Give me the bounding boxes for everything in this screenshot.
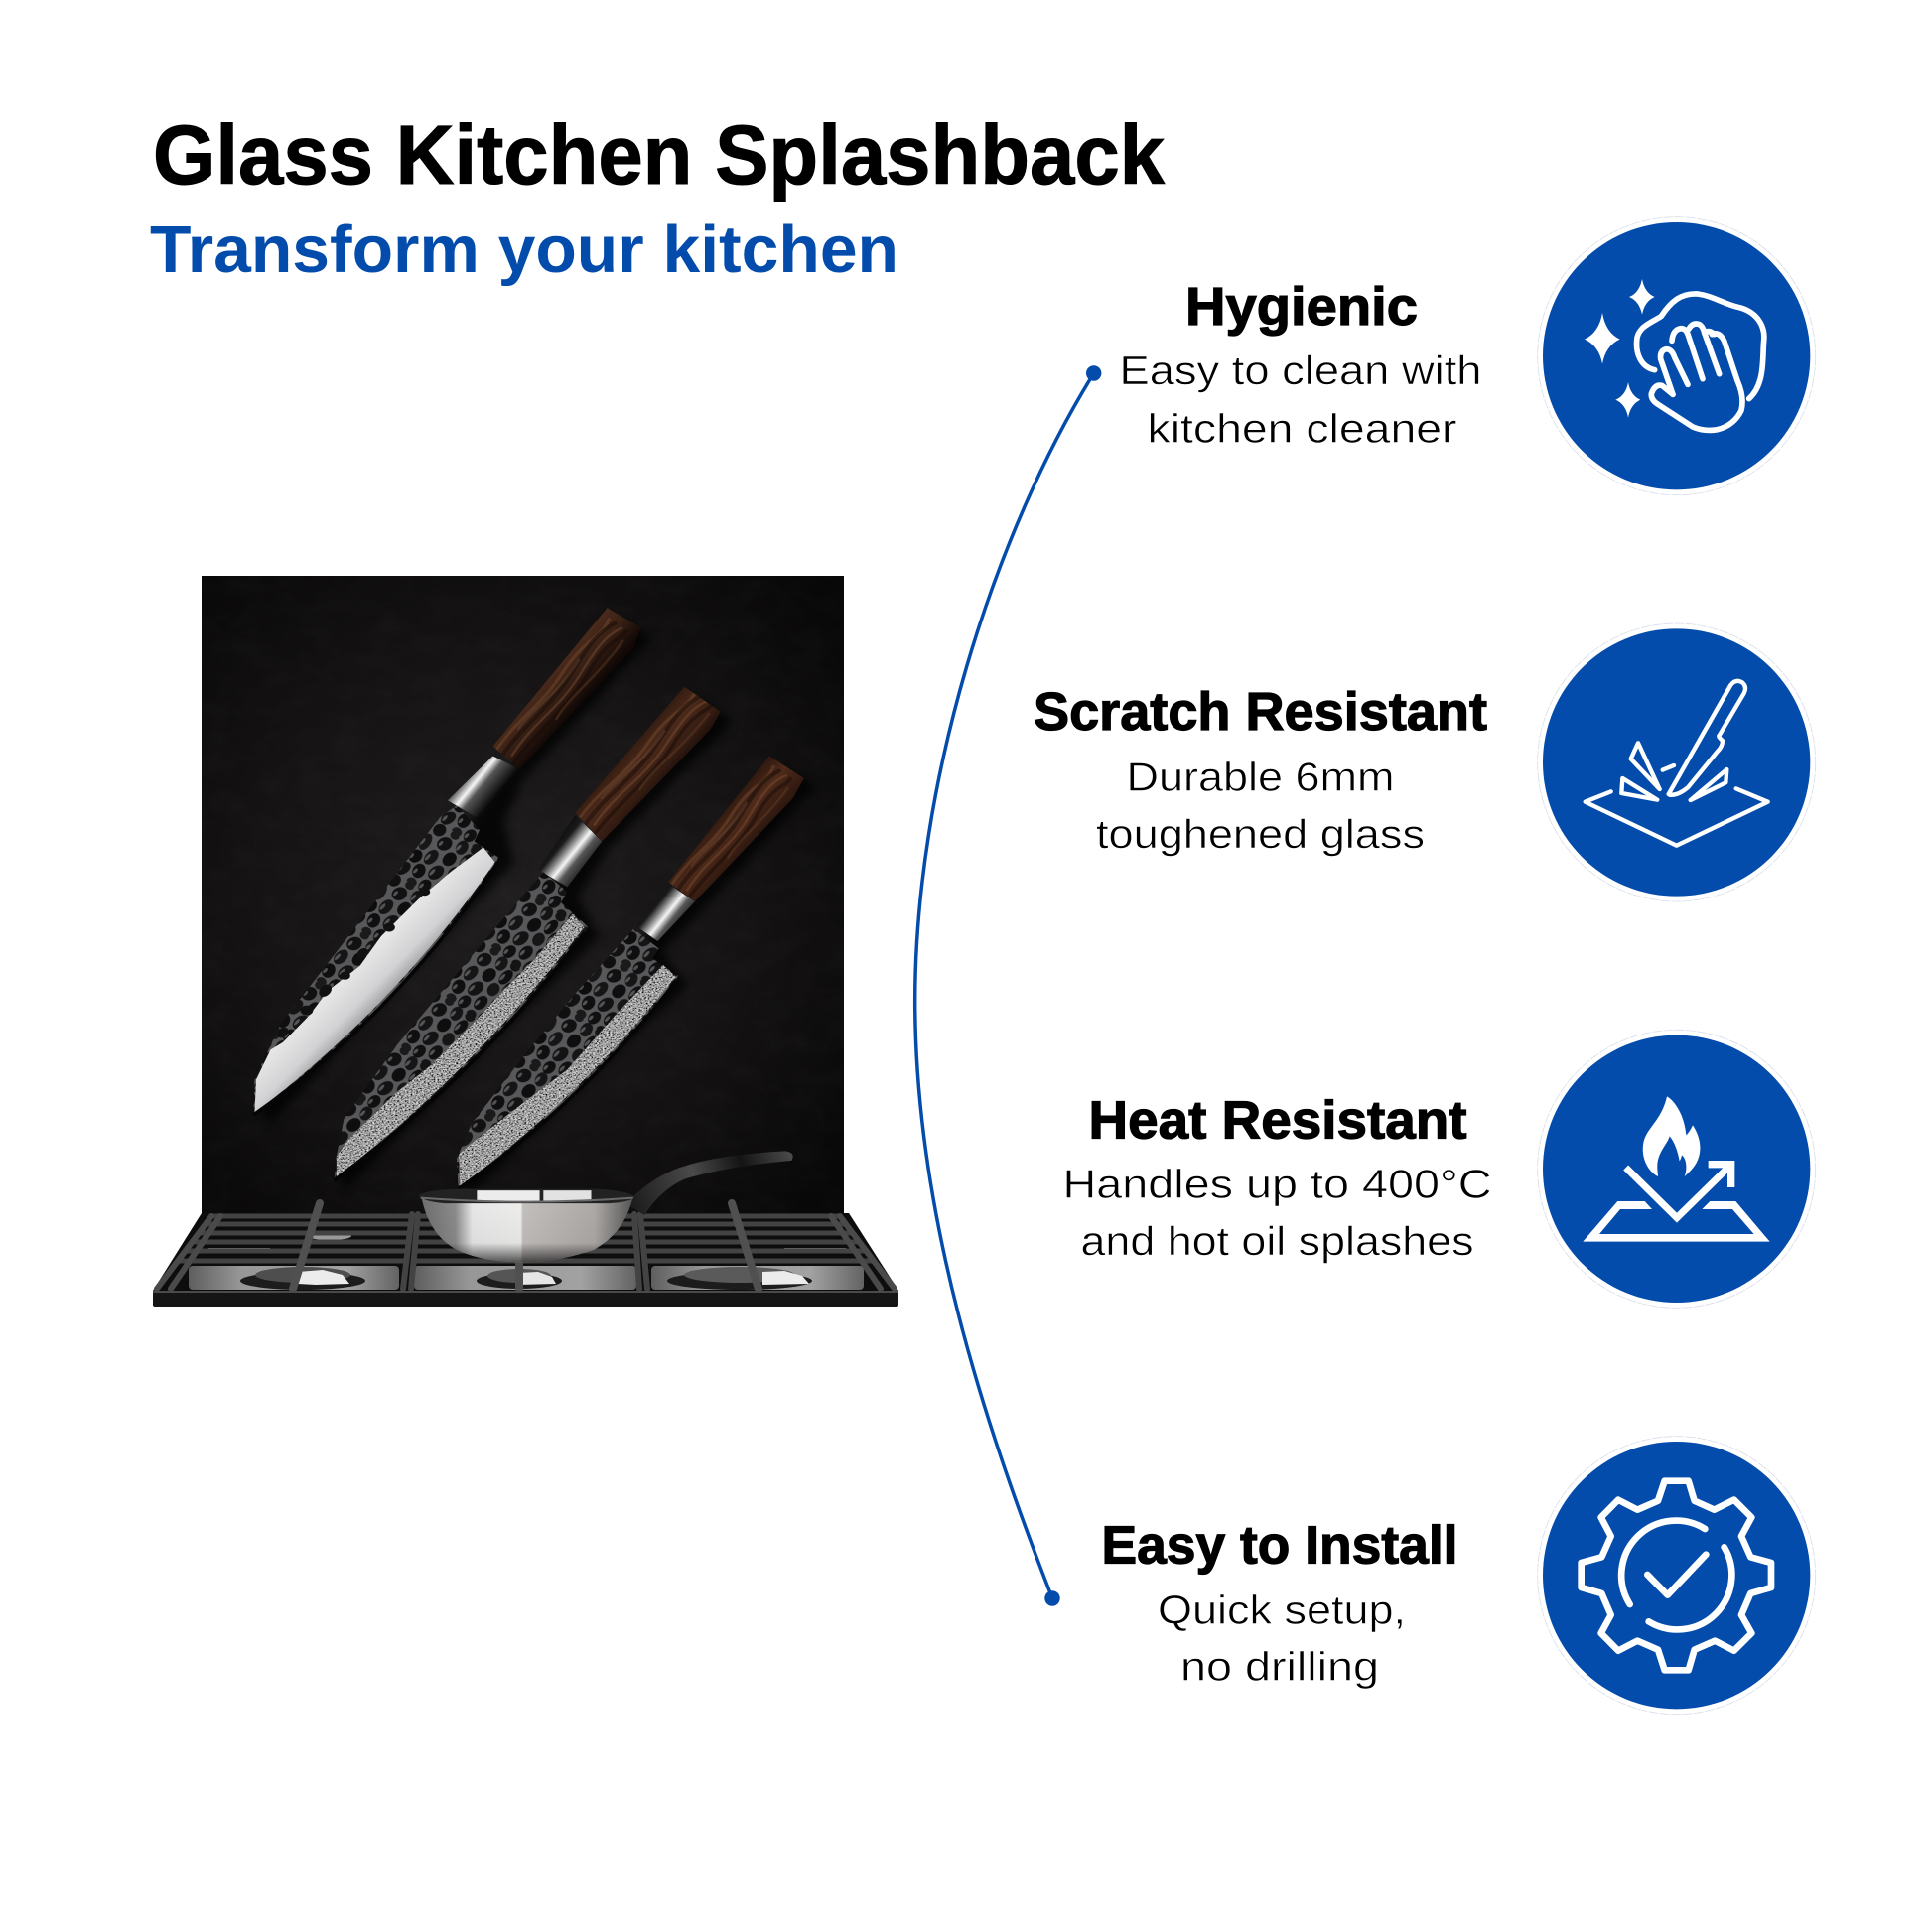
text: easy to clean [1120,347,1481,452]
gas hob [153,1203,898,1307]
burners [208,1231,846,1290]
burner trays [189,1266,864,1290]
heading: Hygienic: Hygienic [1185,277,1418,337]
knife 3 blade [457,929,678,1189]
icon: gear with check mark [1538,1437,1816,1715]
heading: Easy to Install: Easy to Install [1102,1515,1457,1575]
knife 3 handle [668,756,804,901]
knife 2 blade [335,872,588,1180]
text: durable glass: toughened glass [1096,811,1425,857]
feature: scratch resistant [1034,682,1487,857]
knife 2 ferrule [538,815,602,887]
hob deck [153,1213,898,1291]
text: durable glass: Durable 6mm [1126,755,1394,800]
pan handle [625,1151,793,1215]
frying pan [418,1151,793,1262]
knife set [253,608,815,1198]
knife 2 [335,687,721,1180]
knife 1 blade [253,805,498,1115]
infographic canvas [151,122,1816,1716]
text: quick setup: no drilling [1180,1643,1379,1689]
text: quick setup [1158,1587,1406,1689]
heading: Heat Resistant: Heat Resistant [1088,1091,1467,1151]
pan rim [418,1189,635,1203]
splashback panel [202,576,844,1221]
knife 2 handle [575,687,721,841]
text: easy to clean: kitchen cleaner [1148,406,1457,452]
feature: hygienic [1120,277,1481,452]
knife 1 [253,608,640,1115]
grate bars [157,1203,895,1289]
title: Glass Kitchen Splashback [153,108,1165,202]
feature: heat resistant [1062,1091,1491,1264]
knife 3 ferrule [636,885,695,941]
text: quick setup: Quick setup, [1158,1587,1406,1633]
heading: Scratch Resistant: Scratch Resistant [1034,682,1487,742]
text: handles heat: Handles up to 400°C [1062,1162,1491,1207]
pan body [422,1198,632,1262]
knife 1 handle [492,608,640,769]
knife 3 [457,756,804,1189]
text: handles heat [1062,1162,1491,1264]
product image: knives splashback over gas hob [153,576,898,1307]
knife shadows [259,621,815,1198]
connector curve [915,365,1101,1606]
icon: flame over surface [1538,1030,1816,1308]
icon: hand wiping with sparkles [1538,217,1816,495]
feature: easy to install [1102,1515,1457,1689]
subtitle: Transform your kitchen [150,212,898,287]
icon: knife scratching glass [1538,623,1816,901]
text: handles heat: and hot oil splashes [1080,1218,1473,1264]
text: easy to clean: Easy to clean with [1120,347,1481,393]
hob front edge [153,1291,898,1307]
text: durable glass [1096,755,1425,857]
knife 1 ferrule [448,756,519,818]
